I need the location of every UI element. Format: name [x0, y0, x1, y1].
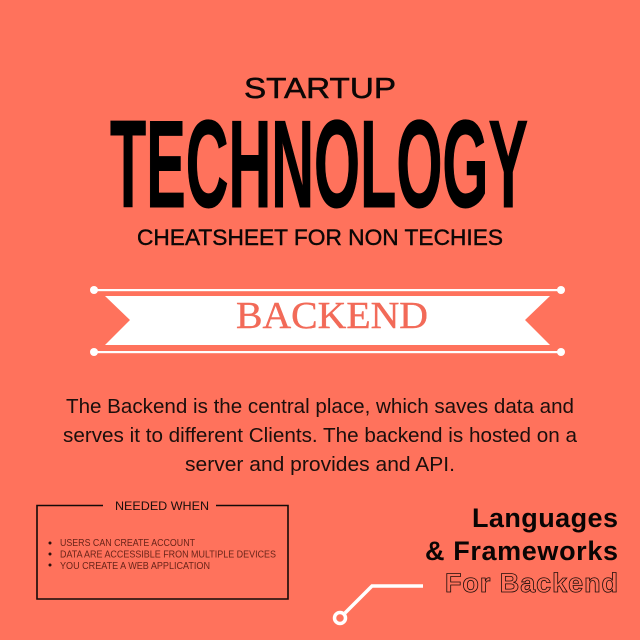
- banner: backend: [90, 286, 565, 356]
- description paragraph: The Backend is the central place, which saves data and: [66, 396, 574, 418]
- bullet list: DATA ARE ACCESSIBLE FRON MULTIPLE DEVICES: [60, 550, 276, 560]
- bullet list: YOU CREATE A WEB APPLICATION: [60, 561, 210, 572]
- panel heading: NEEDED WHEN: [115, 499, 209, 513]
- bullet list: [48, 538, 276, 572]
- frameworks line: & Frameworks: [425, 536, 618, 566]
- ribbon top rule: [90, 286, 565, 294]
- heading: languages and frameworks: [425, 503, 618, 598]
- connector arrow: [334, 586, 423, 624]
- description paragraph: server and provides and API.: [185, 454, 455, 476]
- languages line: Languages: [472, 503, 618, 533]
- panel border: [37, 506, 288, 599]
- description paragraph: [63, 396, 578, 476]
- subtitle: cheatsheet for non techies: CHEATSHEET FOR NON TECHIES: [137, 225, 503, 250]
- bullet list: USERS CAN CREATE ACCOUNT: [60, 538, 195, 549]
- description paragraph: serves it to different Clients. The backend is hosted on a: [63, 425, 578, 447]
- panel: needed when: [37, 499, 288, 599]
- for backend outlined line: For Backend: [445, 568, 618, 598]
- heading: startup: STARTUP: [244, 73, 396, 105]
- banner label: BACKEND: [236, 295, 428, 337]
- ribbon bottom rule: [90, 348, 565, 356]
- ribbon shape: [105, 296, 550, 345]
